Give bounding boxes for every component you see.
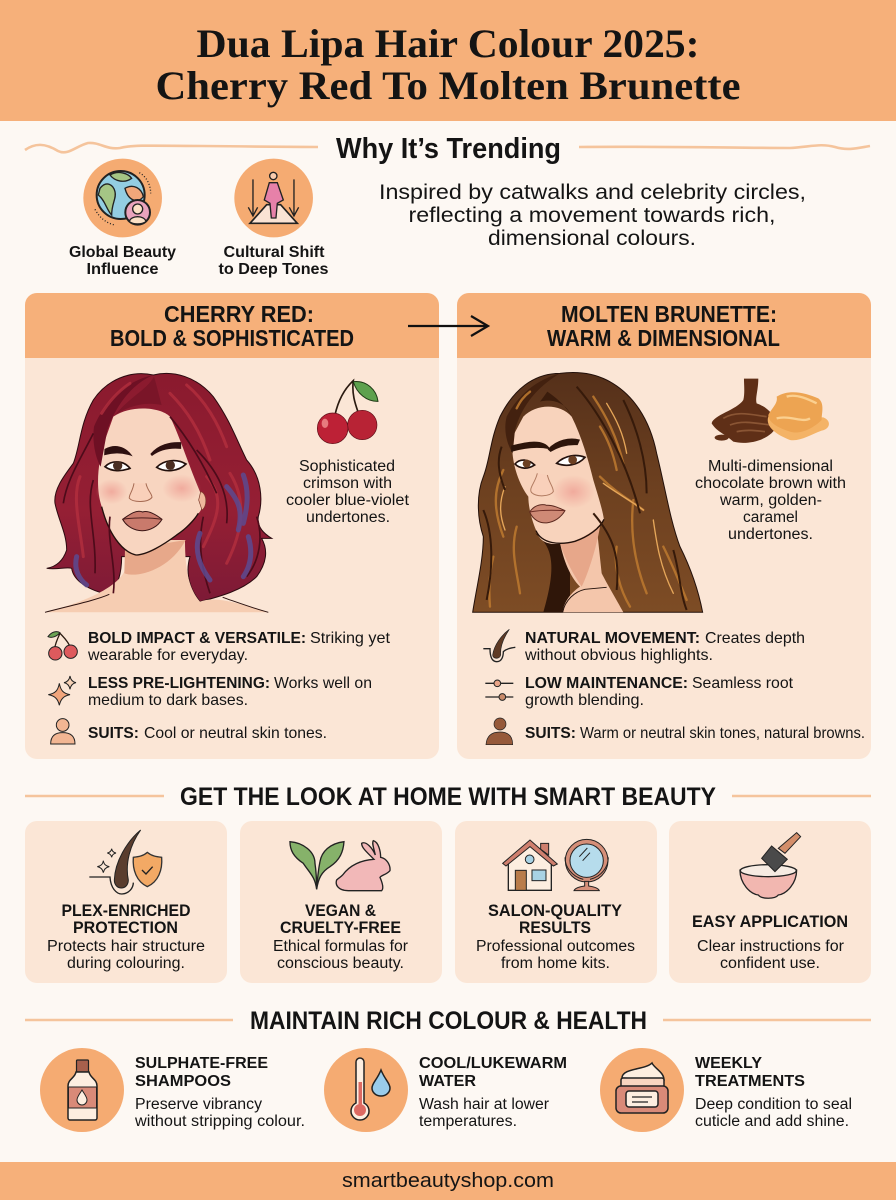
panel heading: molten brunette: MOLTEN BRUNETTE: — [561, 301, 777, 327]
tip text: TREATMENTS — [695, 1073, 805, 1090]
title banner: Dua Lipa Hair Colour 2025: — [196, 21, 700, 66]
card text: RESULTS — [519, 919, 591, 937]
section heading: maintain rich colour: MAINTAIN RICH COLOUR & HEALTH — [250, 1007, 647, 1035]
bullet: suits warm skin: SUITS: — [525, 725, 576, 742]
icon: cherries — [317, 381, 378, 444]
intro text: reflecting a movement towards rich, — [408, 203, 776, 227]
card text — [476, 902, 635, 972]
tip text: Preserve vibrancy — [135, 1096, 262, 1113]
tip text — [695, 1055, 852, 1130]
bullet: bold impact: wearable for everyday. — [87, 647, 248, 664]
molten brunette description: Multi-dimensional — [708, 458, 833, 475]
icon caption: cultural shift — [218, 244, 329, 278]
cherry red description: undertones. — [306, 509, 390, 526]
bullet: less pre-lightening: Works well on — [274, 675, 372, 692]
card text: PLEX-ENRICHED — [62, 902, 191, 920]
cherry red description: cooler blue-violet — [286, 492, 410, 509]
bullet: low maintenance: growth blending. — [525, 692, 644, 709]
tip text: Wash hair at lower — [419, 1096, 549, 1113]
bullet: low maintenance: Seamless root — [692, 675, 794, 692]
icon: global beauty influence — [83, 159, 162, 237]
molten brunette description: chocolate brown with — [695, 475, 846, 492]
icon caption: global beauty influence: Influence — [86, 261, 159, 278]
card text — [47, 902, 205, 972]
bullet: suits warm skin: Warm or neutral skin tones, natural browns. — [580, 725, 865, 742]
icon: sparkles — [48, 676, 76, 705]
title banner: Cherry Red To Molten Brunette — [156, 63, 740, 108]
card text: EASY APPLICATION — [692, 913, 848, 931]
care tip: sulphate-free shampoos — [40, 1048, 305, 1132]
tip text — [419, 1055, 567, 1130]
bullet: less pre-lightening — [88, 675, 372, 709]
bullet: low maintenance — [525, 675, 794, 709]
card text — [692, 913, 848, 972]
card text: conscious beauty. — [277, 955, 404, 972]
panel heading: molten brunette: WARM & DIMENSIONAL — [547, 325, 780, 351]
icon: shampoo bottle — [40, 1048, 124, 1132]
card: plex-enriched protection — [25, 821, 227, 983]
card text: VEGAN & — [305, 902, 376, 920]
panel heading: cherry red: BOLD & SOPHISTICATED — [110, 325, 354, 351]
bullet: natural movement: without obvious highlights. — [524, 647, 713, 664]
bullet: natural movement — [524, 630, 805, 664]
tip text: SULPHATE-FREE — [135, 1055, 268, 1072]
bullet: low maintenance: LOW MAINTENANCE: — [525, 675, 688, 692]
icon caption: cultural shift: Cultural Shift — [224, 244, 325, 261]
icon caption: cultural shift: to Deep Tones — [218, 261, 329, 278]
icon: house and mirror — [503, 839, 608, 891]
care tip: cool water — [324, 1048, 567, 1132]
title banner — [0, 0, 896, 121]
cherry red description: crimson with — [303, 475, 392, 492]
section heading: get the look: GET THE LOOK AT HOME WITH SMART BEAUTY — [180, 783, 716, 811]
tip text: SHAMPOOS — [135, 1073, 231, 1090]
molten brunette description: caramel — [743, 509, 798, 526]
cherry red description — [286, 458, 410, 526]
panel heading: cherry red: CHERRY RED: — [164, 301, 314, 327]
icon: bowl and brush — [740, 833, 801, 898]
bullet: natural movement: Creates depth — [705, 630, 805, 647]
card text: Ethical formulas for — [273, 938, 408, 955]
icon: chocolate and caramel — [712, 379, 829, 443]
footer: smartbeautyshop.com — [342, 1170, 554, 1192]
card text: Protects hair structure — [47, 938, 205, 955]
section heading: why it's trending — [25, 133, 870, 165]
footer — [0, 1162, 896, 1200]
icon: brown person — [486, 718, 513, 745]
panel: molten brunette — [457, 293, 871, 759]
intro text: Inspired by catwalks and celebrity circles, — [379, 180, 806, 204]
card text: Clear instructions for — [697, 938, 844, 955]
card: vegan and cruelty-free — [240, 821, 442, 983]
bullet: suits cool skin: Cool or neutral skin tones. — [144, 725, 327, 742]
icon: leaves and rabbit — [290, 841, 390, 891]
molten brunette description: warm, golden- — [719, 492, 822, 509]
tip text — [134, 1055, 305, 1130]
card text: during colouring. — [67, 955, 185, 972]
icon: sliders — [485, 680, 513, 700]
tip text: without stripping colour. — [134, 1113, 305, 1130]
icon: treatment jar — [600, 1048, 684, 1132]
card text: Professional outcomes — [476, 938, 635, 955]
intro text — [379, 180, 806, 250]
card: easy application — [669, 821, 871, 983]
portrait: molten brunette hair — [473, 372, 703, 612]
icon caption: global beauty influence — [69, 244, 176, 278]
panel heading: molten brunette — [547, 301, 780, 351]
icon: small cherries — [48, 632, 77, 660]
tip text: Deep condition to seal — [695, 1096, 852, 1113]
molten brunette description — [695, 458, 846, 543]
tip text: WEEKLY — [695, 1055, 762, 1072]
bullet: less pre-lightening: medium to dark bases. — [88, 692, 248, 709]
panel: cherry red — [25, 293, 439, 759]
tip text: WATER — [419, 1073, 476, 1090]
portrait: cherry red hair — [45, 373, 272, 612]
card: salon-quality results — [455, 821, 657, 983]
icon caption: global beauty influence: Global Beauty — [69, 244, 176, 261]
card text: CRUELTY-FREE — [280, 919, 401, 937]
icon: thermometer and drop — [324, 1048, 408, 1132]
icon: hair follicle — [483, 629, 515, 662]
cherry red description: Sophisticated — [299, 458, 395, 475]
bullet: natural movement: NATURAL MOVEMENT: — [525, 630, 700, 647]
card text: confident use. — [720, 955, 820, 972]
bullet: bold impact: Striking yet — [310, 630, 391, 647]
arrow: cherry red to molten brunette — [408, 316, 488, 336]
icon: person — [51, 719, 75, 744]
tip text: cuticle and add shine. — [695, 1113, 849, 1130]
molten brunette description: undertones. — [728, 526, 813, 543]
icon: hair and shield — [89, 830, 162, 894]
tip text: temperatures. — [419, 1113, 517, 1130]
care tip: weekly treatments — [600, 1048, 852, 1132]
panel heading: cherry red — [110, 301, 354, 351]
intro text: dimensional colours. — [488, 226, 696, 250]
bullet: less pre-lightening: LESS PRE-LIGHTENING: — [88, 675, 270, 692]
icon: cultural shift — [234, 159, 313, 237]
card text — [273, 902, 408, 972]
bullet: bold impact: BOLD IMPACT & VERSATILE: — [88, 630, 306, 647]
card text: from home kits. — [501, 955, 610, 972]
tip text: COOL/LUKEWARM — [419, 1055, 567, 1072]
bullet: suits cool skin: SUITS: — [88, 725, 139, 742]
card text: PROTECTION — [73, 919, 178, 937]
section heading: why it's trending: Why It’s Trending — [336, 133, 561, 165]
card text: SALON-QUALITY — [488, 902, 622, 920]
bullet: bold impact — [87, 630, 391, 664]
